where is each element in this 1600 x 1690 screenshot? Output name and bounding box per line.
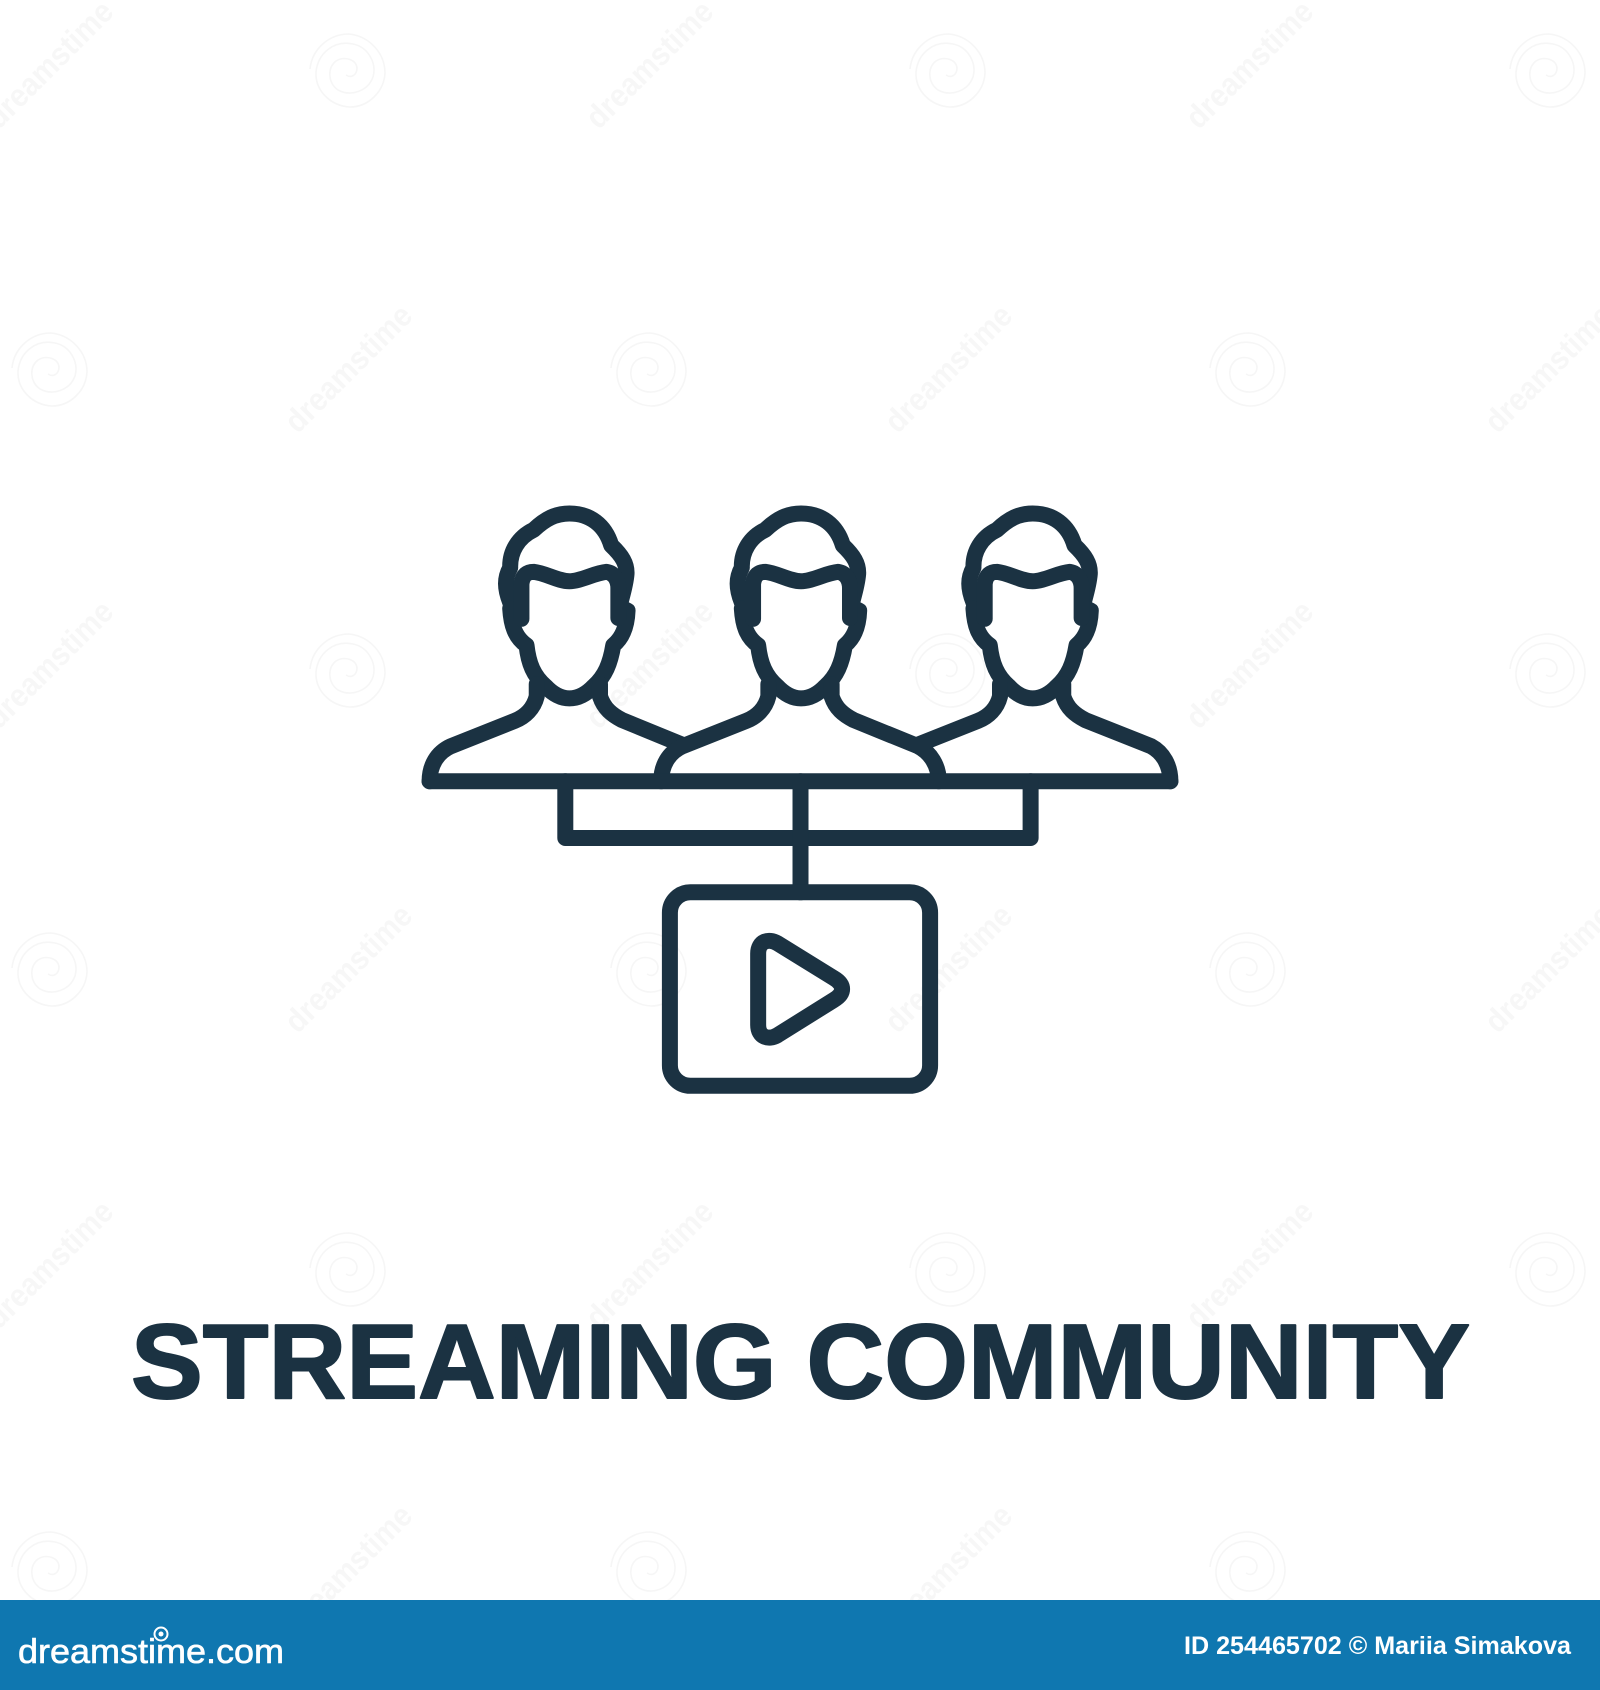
icon: person right bbox=[916, 513, 1170, 781]
connector lines bbox=[430, 781, 1170, 892]
footer logo: dreamstime.com bbox=[18, 1633, 284, 1671]
footer bar bbox=[0, 1600, 1600, 1690]
icon: person left bbox=[430, 513, 684, 781]
icon: video frame bbox=[670, 892, 930, 1086]
footer credit: ID 254465702 © Mariia Simakova bbox=[1184, 1632, 1572, 1660]
title: STREAMING COMMUNITY bbox=[131, 1303, 1470, 1421]
icon: play triangle bbox=[758, 941, 842, 1038]
icon: person centre bbox=[661, 513, 939, 781]
icon: streaming community bbox=[430, 513, 1170, 1086]
